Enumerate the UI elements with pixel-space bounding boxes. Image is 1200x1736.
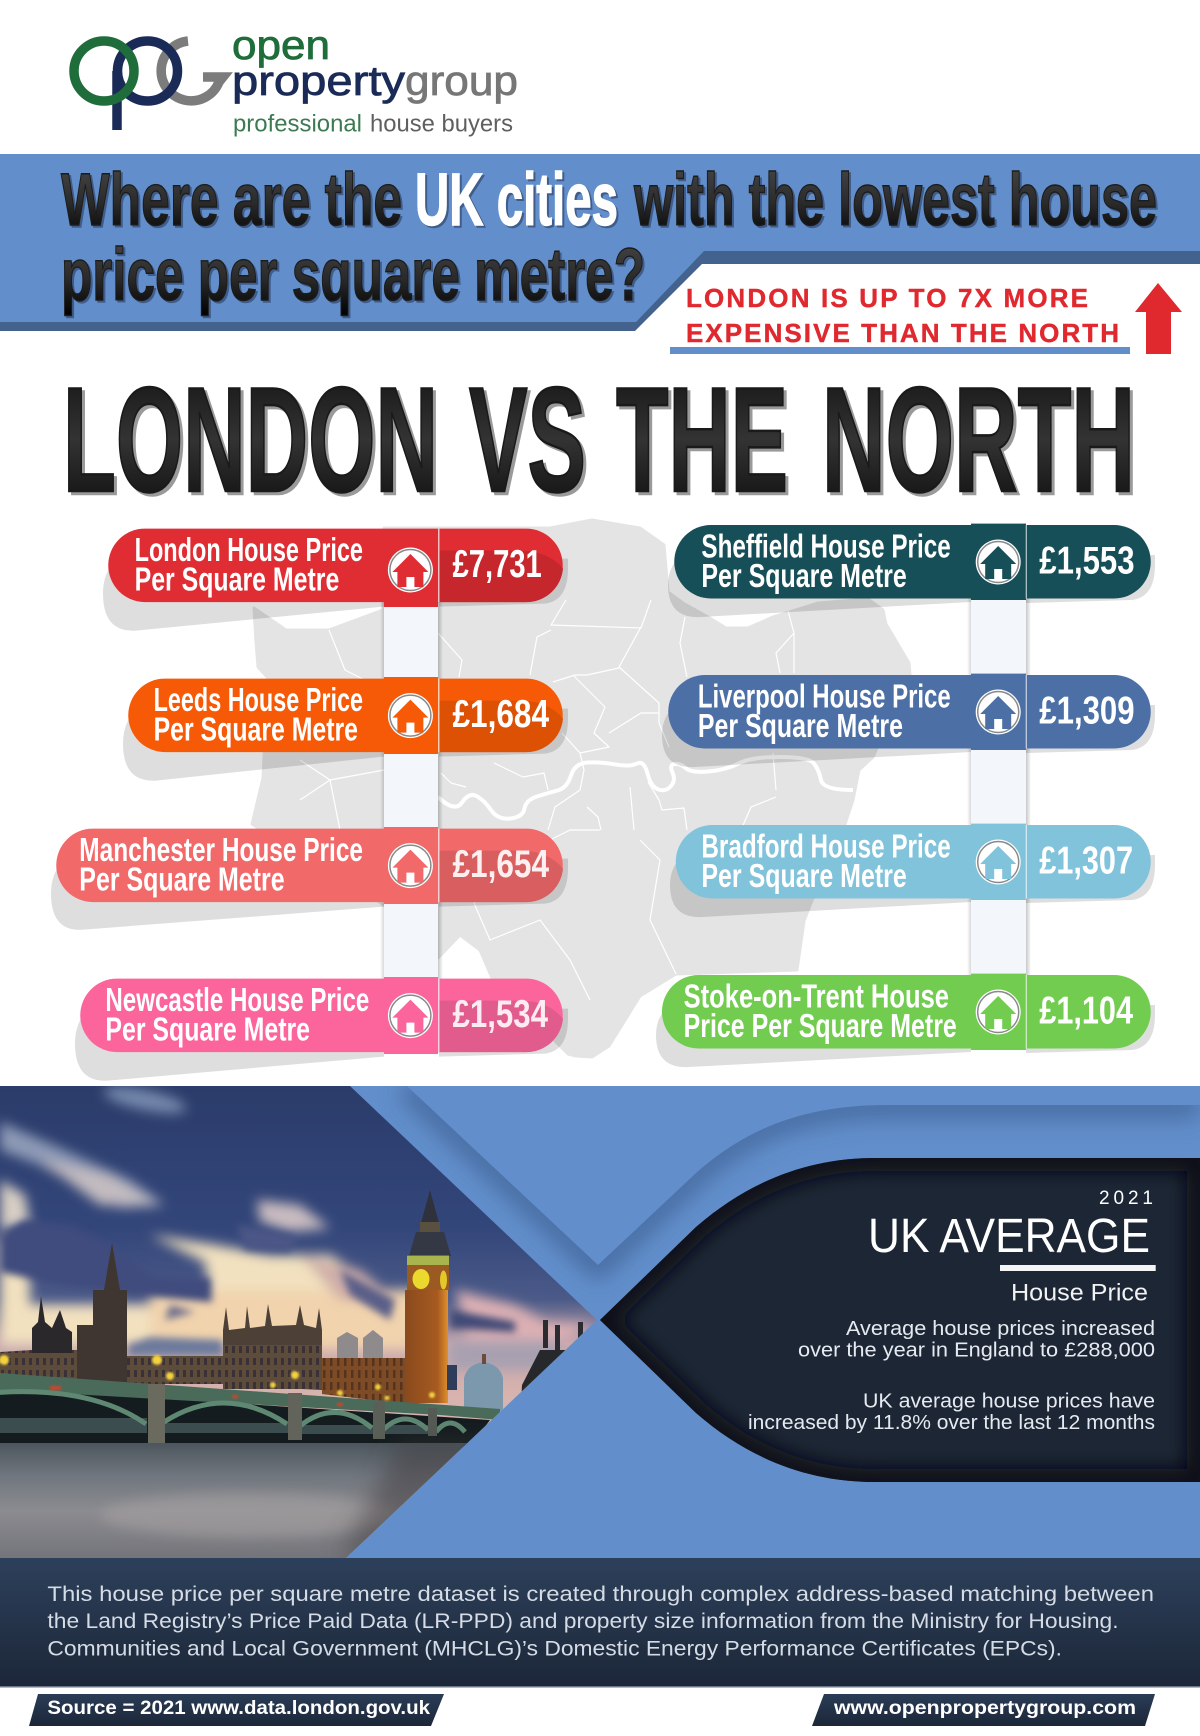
dark panel: UK average bbox=[600, 1158, 1200, 1482]
pill: Bradford bbox=[670, 824, 1155, 917]
icon: house bbox=[976, 990, 1021, 1034]
icon: house bbox=[388, 548, 433, 592]
logo rings bbox=[74, 41, 223, 130]
pill: Manchester: £1,654 bbox=[452, 843, 549, 886]
big title: London vs the North: LONDON bbox=[63, 356, 438, 523]
Thames water bbox=[0, 1442, 610, 1558]
website badge: www.openpropertygroup.com bbox=[833, 1698, 1136, 1719]
Big Ben bbox=[405, 1190, 451, 1403]
pill: Leeds: Per Square Metre bbox=[154, 711, 358, 748]
panel text: Average house prices increased bbox=[846, 1318, 1155, 1340]
source badge bbox=[29, 1694, 444, 1726]
Westminster Bridge bbox=[0, 1373, 500, 1447]
pill: Liverpool: Liverpool House Price bbox=[698, 677, 951, 714]
logo wordmark: open bbox=[232, 22, 330, 68]
logo wordmark bbox=[232, 22, 518, 138]
pill: Sheffield: Per Square Metre bbox=[701, 557, 907, 594]
pill: Manchester: Manchester House Price bbox=[79, 831, 363, 868]
logo wordmark: group bbox=[405, 57, 518, 104]
website badge bbox=[812, 1694, 1155, 1726]
panel text: increased by 11.8% over the last 12 months bbox=[748, 1412, 1155, 1434]
pill: Bradford: Bradford House Price bbox=[701, 827, 951, 864]
pill: Liverpool: Per Square Metre bbox=[698, 707, 903, 744]
icon: house bbox=[976, 540, 1021, 584]
main question heading bbox=[61, 158, 1157, 316]
pill: Bradford: Per Square Metre bbox=[701, 857, 907, 894]
pill: Sheffield: Sheffield House Price bbox=[701, 527, 951, 564]
pill: Manchester bbox=[51, 827, 568, 930]
icon: house bbox=[976, 690, 1021, 734]
logo: open property group bbox=[74, 22, 518, 138]
blue lower section background bbox=[346, 1086, 1200, 1558]
icon: house bbox=[388, 843, 433, 888]
footer note panel: Communities and Local Government (MHCLG)’s Domestic Energy Performance Certificates (EPCs). bbox=[47, 1638, 1062, 1661]
pill: Liverpool: £1,309 bbox=[1039, 690, 1135, 732]
left column: vertical strip bbox=[380, 600, 443, 980]
icon: house bbox=[976, 840, 1021, 884]
logo wordmark: property bbox=[232, 57, 405, 104]
pill: Newcastle bbox=[75, 977, 568, 1081]
panel text: 2021 bbox=[1099, 1188, 1153, 1209]
big title: London vs the North: VS bbox=[469, 356, 586, 523]
pill: London: £7,731 bbox=[452, 543, 542, 586]
pill: London bbox=[103, 529, 568, 631]
footer note panel bbox=[0, 1558, 1200, 1688]
source badge: Source = 2021 www.data.london.gov.uk bbox=[47, 1698, 430, 1719]
panel text: over the year in England to £288,000 bbox=[798, 1340, 1155, 1362]
panel text bbox=[748, 1188, 1156, 1434]
right column: vertical strip bbox=[967, 595, 1031, 980]
pill: Stoke-on-Trent: £1,104 bbox=[1039, 990, 1133, 1032]
pill: London: Per Square Metre bbox=[135, 561, 339, 598]
red callout: London is up to 7x more expensive: EXPENSIVE THAN THE NORTH bbox=[686, 318, 1119, 348]
lamps bbox=[0, 1355, 435, 1406]
main question heading: UK cities bbox=[415, 158, 618, 241]
red callout: London is up to 7x more expensive bbox=[670, 283, 1130, 354]
pill: Newcastle: Per Square Metre bbox=[105, 1011, 310, 1048]
clouds and sky glow bbox=[0, 1081, 590, 1370]
logo wordmark: house buyers bbox=[370, 110, 513, 138]
footer note panel: the Land Registry’s Price Paid Data (LR-PPD) and property size information from the Ministry for Housing. bbox=[47, 1610, 1119, 1633]
pill: Bradford: £1,307 bbox=[1039, 840, 1133, 882]
panel text: House Price bbox=[1011, 1280, 1148, 1307]
Parliament buildings bbox=[0, 1243, 405, 1404]
red callout: London is up to 7x more expensive: LONDON IS UP TO 7X MORE bbox=[686, 283, 1088, 313]
panel text: UK AVERAGE bbox=[868, 1210, 1150, 1263]
header banner bbox=[0, 154, 1200, 331]
pill: Newcastle: Newcastle House Price bbox=[105, 981, 369, 1018]
dome and right buildings bbox=[447, 1320, 600, 1420]
pill: Leeds: Leeds House Price bbox=[154, 681, 363, 718]
pill: Manchester: Per Square Metre bbox=[79, 861, 285, 898]
icon: house bbox=[388, 993, 433, 1038]
panel text: UK average house prices have bbox=[863, 1391, 1155, 1413]
pill: Liverpool bbox=[662, 674, 1155, 767]
footer note panel: This house price per square metre dataset is created through complex address-based matching between bbox=[47, 1583, 1154, 1606]
pill: Stoke-on-Trent: Price Per Square Metre bbox=[684, 1007, 957, 1044]
logo wordmark: professional bbox=[233, 110, 362, 138]
big title: London vs the North: THE bbox=[616, 356, 788, 523]
pill: Stoke-on-Trent bbox=[656, 974, 1155, 1067]
pill: Leeds: £1,684 bbox=[452, 693, 549, 736]
pill: Leeds bbox=[123, 677, 568, 781]
pill: Sheffield bbox=[668, 524, 1155, 617]
map of London background bbox=[252, 520, 910, 1057]
pill: Stoke-on-Trent: Stoke-on-Trent House bbox=[684, 977, 949, 1014]
pill: Newcastle: £1,534 bbox=[452, 993, 548, 1036]
icon: house bbox=[388, 693, 433, 738]
big title: London vs the North bbox=[63, 356, 1135, 523]
main question heading: price per square metre? bbox=[61, 233, 645, 316]
pill: Sheffield: £1,553 bbox=[1039, 540, 1135, 582]
photo: Westminster at dusk bbox=[0, 1081, 610, 1558]
pill: London: London House Price bbox=[135, 531, 363, 568]
main question heading: Where are the bbox=[61, 158, 402, 241]
icon: red up arrow bbox=[1135, 283, 1182, 354]
